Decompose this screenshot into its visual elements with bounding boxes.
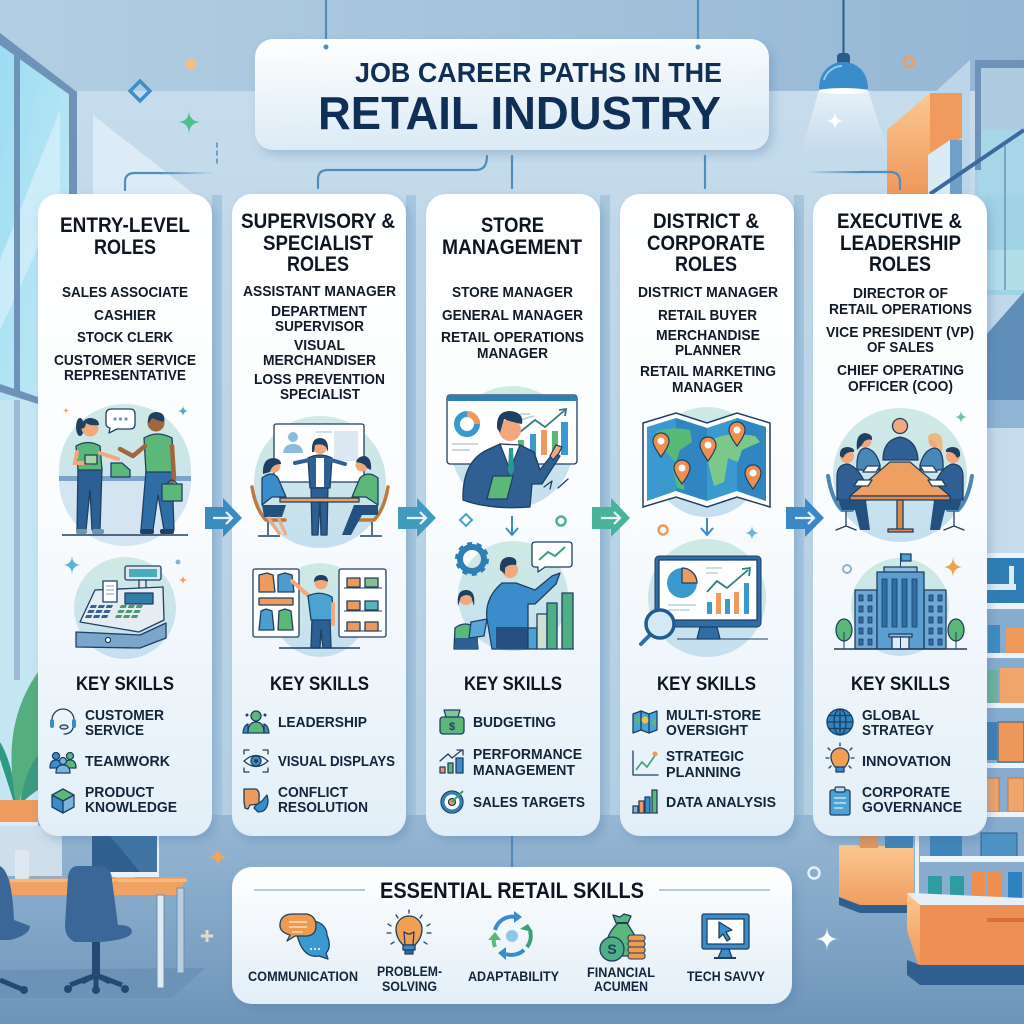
skill: strategic planning: STRATEGIC (666, 748, 744, 765)
skill: tech savvy (687, 914, 765, 984)
skill: communication (248, 914, 358, 984)
arrow: entry-level to supervisory (205, 498, 242, 537)
panel: essential retail skills (232, 867, 792, 1004)
job list: executive: DIRECTOR OF (853, 285, 948, 302)
heading: supervisory and specialist roles: SPECIALIST (263, 232, 373, 255)
heading: key skills: KEY SKILLS (76, 674, 174, 695)
skill: leadership (243, 711, 367, 733)
illustration: team meeting (252, 416, 388, 548)
illustration: manager presenting dashboard (447, 386, 577, 535)
skill: multi-store oversight: MULTI-STORE (666, 707, 761, 724)
heading: executive and leadership roles (837, 210, 962, 276)
store shelves with products (839, 553, 1024, 985)
skill: financial acumen: ACUMEN (594, 979, 648, 994)
skill: customer service: CUSTOMER (85, 707, 164, 724)
heading: store management: MANAGEMENT (442, 236, 582, 259)
heading: district and corporate roles: DISTRICT & (653, 210, 759, 233)
job list: supervisory: ASSISTANT MANAGER (243, 283, 396, 300)
job list: executive (826, 285, 974, 395)
heading: supervisory and specialist roles: SUPERVISORY & (241, 210, 395, 233)
skill: sales targets: SALES TARGETS (473, 794, 585, 811)
panel: entry-level roles (38, 194, 212, 836)
skill: conflict resolution: RESOLUTION (278, 799, 368, 816)
skill: budgeting: BUDGETING (473, 714, 556, 731)
decorative sparkles and shapes (130, 57, 914, 951)
job list: entry-level (54, 284, 196, 384)
arrow: district to executive (786, 498, 824, 537)
job list: store management: RETAIL OPERATIONS (441, 329, 584, 346)
job list: district and corporate: MERCHANDISE (656, 327, 760, 344)
title line 2: RETAIL INDUSTRY (318, 87, 721, 139)
arrow: supervisory to store management (398, 498, 436, 537)
skill: visual displays (244, 750, 395, 772)
skill: corporate governance: GOVERNANCE (862, 799, 962, 816)
desk with monitors and office chairs (0, 826, 205, 998)
skill: data analysis: DATA ANALYSIS (666, 794, 776, 811)
panel: executive and leadership roles (813, 194, 987, 836)
job list: supervisory (243, 283, 396, 403)
illustration: boardroom meeting (828, 408, 972, 542)
job list: supervisory: MERCHANDISER (263, 352, 376, 369)
heading: executive and leadership roles: ROLES (869, 253, 931, 276)
skill: customer service (50, 707, 164, 739)
job list: entry-level: SALES ASSOCIATE (62, 284, 188, 301)
heading: key skills: KEY SKILLS (657, 674, 756, 695)
skill: global strategy: STRATEGY (862, 722, 934, 739)
connector lines (125, 0, 900, 867)
skill: problem-solving: SOLVING (382, 979, 437, 994)
heading: executive and leadership roles: EXECUTIVE & (837, 210, 962, 233)
job list: store management: GENERAL MANAGER (442, 307, 583, 324)
job list: district and corporate: MANAGER (672, 379, 743, 396)
job list: entry-level: STOCK CLERK (77, 329, 173, 346)
skill: budgeting: $ (449, 721, 455, 733)
job list: executive: RETAIL OPERATIONS (829, 301, 972, 318)
skill: teamwork: TEAMWORK (85, 753, 170, 770)
skill: product knowledge (52, 784, 177, 816)
heading: executive and leadership roles: LEADERSHIP (840, 232, 961, 255)
job list: district and corporate: RETAIL MARKETING (640, 363, 776, 380)
job list: supervisory: LOSS PREVENTION (254, 371, 385, 388)
skill: performance management: MANAGEMENT (473, 762, 575, 779)
skill: global strategy: GLOBAL (862, 707, 920, 724)
job list: district and corporate (638, 284, 778, 396)
job list: executive: OFFICER (COO) (848, 378, 953, 395)
heading: entry-level roles: ROLES (94, 236, 156, 259)
skill: budgeting (440, 710, 556, 734)
heading: district and corporate roles: CORPORATE (647, 232, 765, 255)
job list: supervisory: VISUAL (294, 337, 345, 354)
skill: adaptability (468, 911, 559, 984)
skill: global strategy (827, 707, 934, 739)
panel: store management (426, 194, 600, 836)
job list: district and corporate: DISTRICT MANAGER (638, 284, 778, 301)
job list: executive: VICE PRESIDENT (VP) (826, 324, 974, 341)
job list: entry-level: CASHIER (94, 307, 156, 324)
skill: performance management (440, 746, 582, 779)
skill: teamwork (50, 752, 170, 773)
skill: adaptability: ADAPTABILITY (468, 969, 559, 984)
heading: store management (442, 214, 582, 259)
arrow: store management to district (592, 498, 630, 537)
skill: communication: COMMUNICATION (248, 969, 358, 984)
job list: executive: OF SALES (867, 339, 934, 356)
skill: product knowledge: KNOWLEDGE (85, 799, 177, 816)
skill: corporate governance: CORPORATE (862, 784, 950, 801)
heading: key skills: KEY SKILLS (270, 674, 369, 695)
heading: supervisory and specialist roles: ROLES (287, 253, 349, 276)
architecture: orange column, stairs, right window (887, 60, 1024, 553)
heading: essential retail skills: ESSENTIAL RETAIL SKILLS (380, 878, 644, 903)
job list: store management: MANAGER (477, 345, 548, 362)
illustration: cash register (62, 555, 188, 659)
skill: tech savvy: TECH SAVVY (687, 969, 765, 984)
illustration: store location map (643, 407, 770, 541)
heading: district and corporate roles: ROLES (675, 253, 737, 276)
potted plant (0, 672, 38, 826)
panel: supervisory and specialist roles (232, 194, 406, 836)
skill: performance management: PERFORMANCE (473, 746, 582, 763)
skill: corporate governance (830, 784, 962, 816)
illustration: analytics monitor with magnifier (641, 539, 768, 657)
skill: innovation (826, 743, 951, 772)
skill: problem-solving (377, 910, 442, 994)
job list: executive: CHIEF OPERATING (837, 362, 964, 379)
job list: district and corporate: PLANNER (675, 342, 741, 359)
illustration: corporate headquarters building (834, 553, 967, 656)
heading: entry-level roles: ENTRY-LEVEL (60, 214, 190, 237)
skill: product knowledge: PRODUCT (85, 784, 154, 801)
skill: strategic planning (633, 748, 744, 781)
skill: visual displays: VISUAL DISPLAYS (278, 753, 395, 770)
left window (0, 33, 77, 800)
job list: supervisory: DEPARTMENT (271, 303, 367, 320)
skill: innovation: INNOVATION (862, 753, 951, 770)
heading: store management: STORE (481, 214, 544, 237)
skill: conflict resolution: CONFLICT (278, 784, 348, 801)
skill: customer service: SERVICE (85, 722, 144, 739)
title line 1: JOB CAREER PATHS IN THE (355, 57, 722, 88)
job list: district and corporate: RETAIL BUYER (658, 307, 757, 324)
skill: leadership: LEADERSHIP (278, 714, 367, 731)
heading: district and corporate roles (647, 210, 765, 276)
heading: key skills: KEY SKILLS (851, 674, 950, 695)
heading: supervisory and specialist roles (241, 210, 395, 276)
skill: multi-store oversight (633, 707, 761, 739)
skill: financial acumen: S (607, 941, 617, 957)
job list: store management: STORE MANAGER (452, 284, 573, 301)
skill: financial acumen: FINANCIAL (587, 965, 655, 980)
job list: supervisory: SPECIALIST (280, 386, 360, 403)
skill: conflict resolution (244, 784, 368, 816)
skill: multi-store oversight: OVERSIGHT (666, 722, 748, 739)
panel: district and corporate roles (620, 194, 794, 836)
pendant lamp (801, 0, 888, 152)
skill: sales targets (441, 791, 585, 813)
skill: data analysis (632, 790, 776, 813)
job list: entry-level: REPRESENTATIVE (64, 367, 186, 384)
job list: entry-level: CUSTOMER SERVICE (54, 352, 196, 369)
job list: supervisory: SUPERVISOR (275, 318, 364, 335)
heading: key skills: KEY SKILLS (464, 674, 562, 695)
skill: financial acumen (587, 914, 655, 994)
illustration: visual merchandiser at displays (253, 563, 386, 657)
job list: store management (441, 284, 584, 362)
illustration: customer service at counter (59, 404, 191, 546)
skill: strategic planning: PLANNING (666, 764, 741, 781)
illustration: team reviewing growth chart (454, 541, 574, 651)
title banner (255, 39, 769, 150)
skill: problem-solving: PROBLEM- (377, 964, 442, 979)
heading: entry-level roles (60, 214, 190, 259)
